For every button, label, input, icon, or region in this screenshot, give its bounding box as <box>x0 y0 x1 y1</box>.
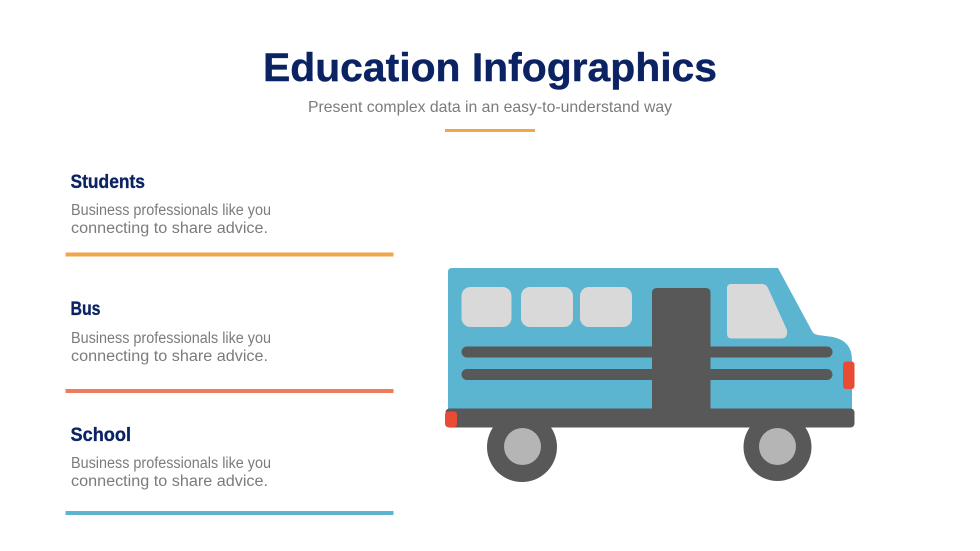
heading: students: Students <box>70 172 145 193</box>
text: students description: connecting to share advice. <box>71 220 268 237</box>
text: bus description: Business professionals like you <box>71 330 271 347</box>
panel: school <box>66 425 394 515</box>
heading: school: School <box>70 425 131 446</box>
text: school description: Business professionals like you <box>71 455 271 472</box>
title: Education Infographics <box>263 46 717 90</box>
panel: bus <box>66 299 394 393</box>
text: bus description: connecting to share advice. <box>71 348 268 365</box>
title underline <box>445 129 535 132</box>
bus rule <box>66 389 394 393</box>
subtitle: Present complex data in an easy-to-understand way <box>308 99 672 116</box>
text: school description: connecting to share advice. <box>71 473 268 490</box>
windows <box>462 287 632 327</box>
side stripes <box>462 346 832 380</box>
rear light <box>445 412 457 427</box>
school rule <box>66 511 394 515</box>
windshield <box>727 284 787 338</box>
bus body <box>448 268 852 410</box>
text: students description: Business professionals like you <box>71 202 271 219</box>
front wheel <box>744 413 812 481</box>
students rule <box>66 252 394 256</box>
panel: students <box>66 172 394 256</box>
door <box>652 288 710 415</box>
chassis <box>446 408 854 428</box>
icon: school bus <box>445 268 854 482</box>
heading: bus: Bus <box>70 299 100 320</box>
front light <box>843 362 854 389</box>
rear wheel <box>487 412 557 482</box>
